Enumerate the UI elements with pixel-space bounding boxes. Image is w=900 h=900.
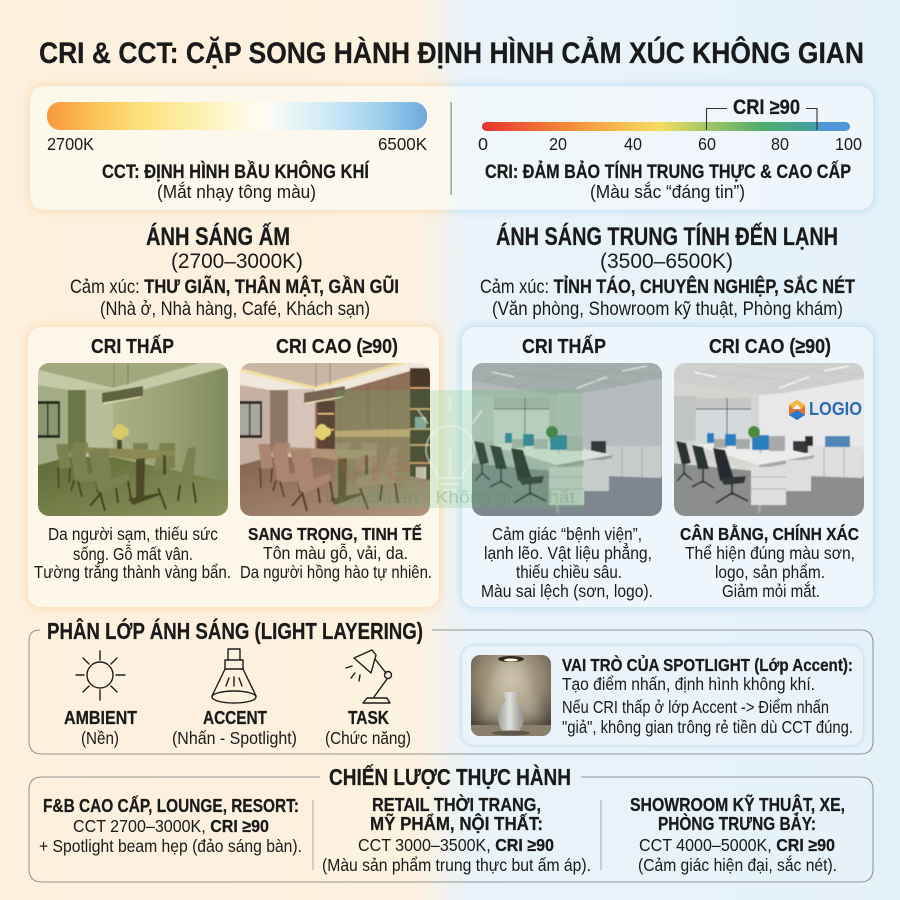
- callout text: "giả", không gian trông rẻ tiền dù CCT đúng.: [562, 717, 853, 737]
- CCT scale labels: 6500K: [378, 134, 427, 154]
- accent label: [172, 707, 297, 748]
- icon: ambient sun: [76, 651, 125, 700]
- panel: practical strategy: [29, 763, 873, 882]
- CCT heading: [102, 159, 369, 202]
- heading: neutral to cool light: (3500–6500K): [600, 249, 733, 273]
- CRI scale labels: 20: [549, 134, 567, 154]
- panel: cool light comparison: [460, 325, 875, 609]
- strategy: showroom: PHÒNG TRƯNG BÀY:: [658, 813, 816, 834]
- strategy: retail: (Màu sản phẩm trung thực but ấm áp).: [322, 855, 591, 875]
- callout text: Tạo điểm nhấn, định hình không khí.: [562, 674, 815, 694]
- CRI heading: (Màu sắc “đáng tin”): [590, 181, 745, 202]
- task label: (Chức năng): [325, 728, 411, 748]
- caption: low CRI office effect: lạnh lẽo. Vật liệu phẳng,: [484, 542, 652, 563]
- watermark: Đèn chuẩn - Không gian chất: [325, 487, 575, 507]
- strategy: retail: RETAIL THỜI TRANG,: [372, 794, 541, 815]
- sub-heading: low CRI: CRI THẤP: [91, 335, 174, 358]
- CCT scale labels: 2700K: [47, 134, 94, 154]
- CCT heading: (Mắt nhạy tông màu): [157, 181, 316, 202]
- accent label: ACCENT: [203, 707, 268, 728]
- heading: warm light: (Nhà ở, Nhà hàng, Café, Khách sạn): [100, 298, 370, 320]
- strategy: food and beverage: F&B CAO CẤP, LOUNGE, RESORT:: [43, 795, 299, 816]
- callout text: Nếu CRI thấp ở lớp Accent -> Điểm nhấn: [562, 697, 829, 717]
- photo: dining room high CRI: [237, 360, 433, 519]
- caption: low CRI office effect: Màu sai lệch (sơn, logo).: [481, 581, 653, 601]
- CRI 90 bracket: CRI ≥90: [733, 96, 800, 119]
- task label: TASK: [348, 707, 390, 728]
- strategy: food and beverage: [39, 795, 302, 856]
- ambient label: [64, 707, 138, 748]
- CRI scale labels: 40: [624, 134, 642, 154]
- watermark: Việt: [334, 448, 430, 489]
- sub-heading: high CRI: CRI CAO (≥90): [276, 335, 398, 358]
- CRI scale labels: 0: [478, 134, 488, 154]
- photo: vase under spotlight: [471, 655, 551, 736]
- CCT scale labels: [47, 134, 427, 154]
- watermark: [325, 390, 582, 508]
- caption: high CRI office effect: Giảm mỏi mắt.: [722, 580, 820, 601]
- caption: high CRI office effect: CÂN BẰNG, CHÍNH XÁC: [680, 523, 859, 544]
- sub-heading: high CRI office: CRI CAO (≥90): [709, 335, 831, 358]
- caption: low CRI office effect: thiếu chiều sâu.: [516, 562, 622, 582]
- photo: office high CRI: [671, 360, 867, 519]
- strategy: food and beverage: CCT 2700–3000K, CRI ≥90: [73, 816, 269, 836]
- caption: low CRI effect: Da người sạm, thiếu sức: [48, 524, 218, 544]
- heading: neutral to cool light: (Văn phòng, Showroom kỹ thuật, Phòng khám): [492, 298, 843, 320]
- CRI scale labels: 60: [698, 134, 716, 154]
- caption: low CRI effect: Tường trắng thành vàng bẩn.: [34, 561, 231, 582]
- panel: warm light comparison: [26, 325, 441, 609]
- CRI heading: [485, 160, 851, 202]
- photo: office low CRI: [469, 360, 665, 519]
- caption: high CRI effect: [240, 523, 432, 582]
- strategy: food and beverage: + Spotlight beam hẹp (đảo sáng bàn).: [39, 836, 302, 856]
- logo on wall: [789, 399, 862, 420]
- heading: neutral to cool light: [480, 222, 855, 320]
- ambient label: (Nền): [81, 728, 119, 748]
- caption: low CRI effect: sống. Gỗ mất vân.: [73, 543, 193, 564]
- logo on wall: LOGIO: [809, 399, 862, 419]
- layering heading: PHÂN LỚP ÁNH SÁNG (LIGHT LAYERING): [47, 617, 423, 644]
- accent label: (Nhấn - Spotlight): [172, 728, 297, 748]
- strategy: showroom: [630, 794, 845, 875]
- heading: warm light: Cảm xúc: THƯ GIÃN, THÂN MẬT, GẦN GŨI: [70, 274, 399, 298]
- task label: [325, 707, 411, 748]
- heading: warm light: [70, 222, 399, 320]
- sub-heading: low CRI office: CRI THẤP: [522, 335, 606, 358]
- CCT gradient bar: [47, 102, 427, 130]
- CRI scale labels: [478, 134, 862, 154]
- heading: warm light: (2700–3000K): [171, 249, 303, 273]
- strategy: retail: [322, 794, 591, 875]
- CRI scale labels: 100: [835, 134, 862, 154]
- caption: high CRI effect: SANG TRỌNG, TINH TẾ: [248, 523, 422, 544]
- heading: warm light: ÁNH SÁNG ẤM: [146, 222, 290, 251]
- caption: low CRI office effect: Cảm giác “bệnh viện”,: [492, 524, 642, 544]
- callout text: VAI TRÒ CỦA SPOTLIGHT (Lớp Accent):: [562, 654, 853, 675]
- strategy heading: CHIẾN LƯỢC THỰC HÀNH: [329, 763, 571, 790]
- heading: neutral to cool light: Cảm xúc: TỈNH TÁO, CHUYÊN NGHIỆP, SẮC NÉT: [480, 274, 855, 298]
- strategy: showroom: CCT 4000–5000K, CRI ≥90: [639, 835, 835, 855]
- CRI 90 bracket: [706, 96, 817, 130]
- panel: CCT and CRI scales: [28, 84, 875, 212]
- icon: task lamp: [346, 650, 392, 703]
- ambient label: AMBIENT: [64, 707, 138, 728]
- caption: high CRI office effect: logo, sản phẩm.: [715, 562, 825, 582]
- caption: high CRI effect: Tôn màu gỗ, vải, da.: [263, 542, 408, 563]
- CCT heading: CCT: ĐỊNH HÌNH BẦU KHÔNG KHÍ: [102, 159, 369, 183]
- caption: low CRI office effect: [481, 524, 653, 601]
- strategy: retail: MỸ PHẨM, NỘI THẤT:: [370, 813, 543, 834]
- CRI gradient bar: [482, 122, 850, 131]
- strategy: showroom: (Cảm giác hiện đại, sắc nét).: [638, 854, 837, 875]
- strategy: showroom: SHOWROOM KỸ THUẬT, XE,: [630, 794, 845, 815]
- caption: high CRI office effect: Thể hiện đúng màu sơn,: [685, 543, 855, 563]
- callout: spotlight role: [460, 644, 865, 747]
- panel: light layering: [29, 617, 873, 754]
- callout text: [562, 654, 853, 737]
- strategy: retail: CCT 3000–3500K, CRI ≥90: [358, 835, 554, 855]
- CRI scale labels: 80: [771, 134, 789, 154]
- caption: high CRI office effect: [680, 523, 859, 601]
- caption: high CRI effect: Da người hồng hào tự nhiên.: [240, 562, 432, 582]
- caption: low CRI effect: [34, 524, 231, 582]
- photo: dining room low CRI: [35, 360, 231, 519]
- icon: accent spotlight: [212, 649, 256, 703]
